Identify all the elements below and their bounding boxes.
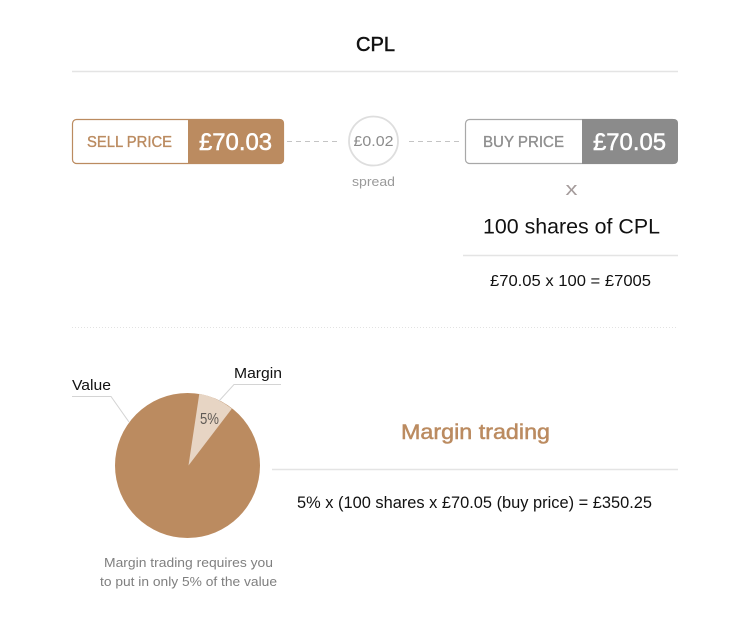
share value formula: £70.05 x 100 = £7005 [490,273,651,290]
pie caption: Margin trading requires you [104,555,273,570]
margin formula: 5% x (100 shares x £70.05 (buy price) = £350.25 [297,494,652,512]
pie caption: to put in only 5% of the value [100,574,277,589]
value label [72,377,129,422]
value label: Value [72,377,111,394]
spread circle: £0.02 [354,133,394,150]
buy price value: £70.05 [593,129,666,156]
sell price value: £70.03 [199,129,272,156]
title: CPL [356,34,395,56]
sell price box [72,119,284,164]
spread circle [349,116,398,166]
margin label: Margin [234,365,282,382]
dashed connector right [409,140,461,142]
dashed connector left [287,140,341,142]
pie chart [115,393,260,538]
buy price box [466,119,678,164]
margin trading heading: Margin trading [401,421,550,444]
shares text: 100 shares of CPL [483,216,660,238]
sell price label: SELL PRICE [87,134,172,151]
pie caption [100,555,277,589]
multiply sign: x [566,179,578,199]
slice label: 5% [200,411,219,428]
margin label [219,365,282,401]
buy price label: BUY PRICE [483,134,564,151]
spread label: spread [352,175,395,189]
margin slice [188,394,232,466]
